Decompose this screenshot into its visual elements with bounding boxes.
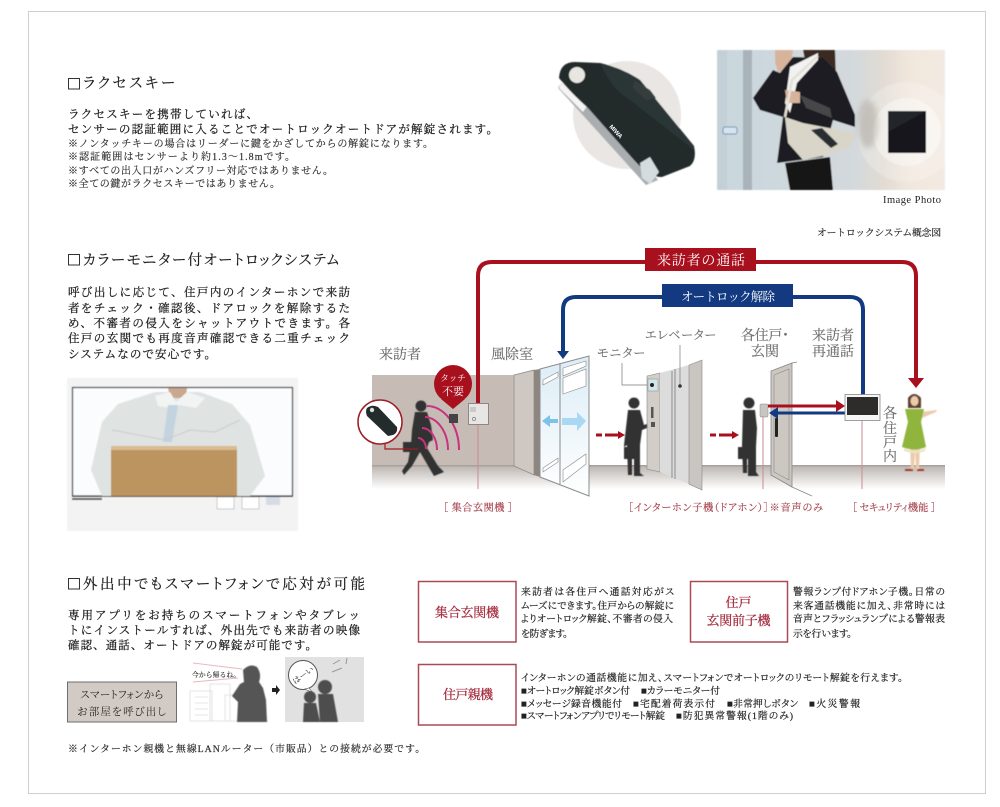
text block: door unit description: 示を行います。 [793, 628, 852, 640]
text block: main unit description: インターホンの通話機能に加え、スマートフォンでオートロックのリモート解錠を行えます。 [521, 671, 903, 684]
text block: Lacses key description [68, 107, 498, 190]
callout: touch not required: タッチ [440, 373, 466, 383]
feature list: ■防犯異常警報(1階のみ) [676, 709, 793, 722]
windbreak room door [514, 356, 589, 496]
illustration: family answering call [285, 657, 364, 722]
text block: smartphone description: 確認、通話、オートドアの解錠が可能です。 [68, 638, 317, 652]
panel: colour monitor auto-lock text [68, 252, 350, 361]
feature list: ■非常押しボタン [727, 697, 798, 710]
image: Lacses key product [558, 61, 695, 185]
device labels [443, 501, 936, 514]
building background: wall and floor [372, 375, 945, 489]
text block: entrance intercom description: を防ぎます。 [521, 627, 568, 640]
red path: visitor call: 来訪者の通話 [657, 252, 745, 269]
arrow: to family at home [272, 685, 280, 695]
text block: Lacses key description: ラクセスキーを携帯していれば、 [68, 107, 258, 121]
label box: entrance intercom [418, 582, 516, 642]
feature list [521, 684, 860, 722]
feature list: ■宅配着荷表示付 [633, 697, 715, 710]
image: Lacses key product: MIWA [608, 124, 624, 141]
text block: entrance intercom description: ムーズにできます。住戸からの解錠に [521, 599, 674, 612]
callout: touch not required [434, 365, 472, 409]
diagram labels: 風除室 [491, 346, 533, 363]
note: router connection required: ※インターホン親機と無線LANルーター（市販品）との接続が必要です。 [68, 742, 425, 755]
blue path: auto-lock release: オートロック解除 [681, 290, 775, 304]
device labels: ［ 集合玄関機 ］ [443, 501, 513, 514]
text block: Lacses key description: ※ノンタッチキーの場合はリーダーに鍵をかざしてからの解錠になります。 [68, 137, 433, 150]
text block: colour monitor description: め、不審者の侵入をシャットアウトできます。各 [68, 316, 350, 330]
feature list: ■火災警報 [809, 697, 860, 710]
text block: door unit description: 音声とフラッシュランプによる警報表 [793, 612, 945, 625]
button: call room from smartphone: お部屋を呼び出し [77, 705, 166, 718]
leader lines [478, 400, 862, 489]
panel: entrance intercom explanation [418, 582, 674, 642]
diagram labels: 再通話 [812, 344, 854, 360]
diagram labels [379, 327, 897, 465]
label box: entrance intercom: 集合玄関機 [435, 605, 500, 620]
diagram labels: エレベーター [645, 328, 716, 342]
text block: entrance intercom description: 来訪者は各住戸へ通話対応がス [521, 585, 674, 598]
diagram labels: 各住戸・ [741, 328, 789, 344]
diagram labels: 来訪者 [812, 327, 854, 344]
device labels: ［ セキュリティ機能 ］ [852, 501, 936, 514]
dashed arrow to residence [710, 431, 739, 439]
residence door [760, 362, 812, 496]
entrance intercom device [468, 404, 488, 424]
text block: smartphone description: トにインストールすれば、外出先でも来訪者の映像 [68, 623, 360, 637]
diagram labels: 各 [883, 406, 897, 422]
elevator hall [622, 345, 702, 490]
panel: door unit explanation [690, 582, 945, 642]
image: monitor showing delivery person [67, 378, 298, 531]
text block: door unit description [793, 585, 945, 640]
text block: Lacses key description: ※全ての鍵がラクセスキーではありません。 [68, 177, 280, 190]
illustration: family answering call: はーい [291, 665, 316, 686]
text block: colour monitor description: システムなので安心です。 [68, 347, 216, 361]
dashed arrow to elevator hall [596, 431, 625, 439]
person at door [738, 398, 759, 476]
illustration: woman calling home by smartphone: 今から帰るね。 [192, 670, 240, 679]
feature list: ■カラーモニター付 [641, 684, 720, 697]
image: woman carrying key past sensor [717, 50, 957, 190]
red path: visitor call [478, 248, 924, 404]
text block: door unit description: 来客通話機能に加え、非常時には [793, 599, 945, 612]
feature list: ■スマートフォンアプリでリモート解錠 [521, 709, 665, 722]
diagram labels: モニター [597, 346, 645, 360]
diagram labels: 玄関 [751, 343, 779, 360]
text block: Lacses key description: ※認証範囲はセンサーより約1.3～1.8mです。 [68, 150, 295, 163]
heading: smartphone response: 外出中でもスマートフォンで応対が可能 [83, 576, 365, 593]
heading: colour monitor auto-lock: カラーモニター付オートロックシステム [83, 252, 339, 269]
text block: door unit description: 警報ランプ付ドアホン子機。日常の [793, 585, 945, 598]
text block: colour monitor description: 者をチェック・確認後、ドアロックを解除するた [68, 301, 350, 315]
room monitor [845, 394, 880, 420]
label box: door unit: 住戸 [725, 595, 752, 610]
diagram labels: 内 [883, 448, 897, 465]
resident woman [902, 394, 937, 471]
blue path: auto-lock release [557, 284, 863, 395]
two-way voice arrows [768, 400, 845, 419]
device labels: ［インターホン子機（ドアホン）］※音声のみ [628, 501, 823, 514]
illustration: woman calling home by smartphone [190, 663, 268, 722]
feature list: ■オートロック解錠ボタン付 [521, 684, 630, 697]
panel: Lacses key text [68, 76, 498, 190]
person at intercom [624, 398, 647, 476]
heading: Lacses key: ラクセスキー [83, 76, 175, 92]
text block: entrance intercom description: よりオートロック解錠、不審者の侵入 [521, 612, 673, 625]
button: call room from smartphone [68, 682, 176, 722]
panel: smartphone response text [68, 576, 365, 652]
button: call room from smartphone: スマートフォンから [80, 689, 163, 701]
panel: main unit explanation [418, 664, 903, 725]
caption: Image Photo: Image Photo [883, 195, 941, 206]
chart: auto-lock system concept diagram [358, 248, 945, 514]
text block: smartphone description: 専用アプリをお持ちのスマートフォンやタブレッ [68, 608, 360, 622]
text block: Lacses key description: ※すべての出入口がハンズフリー対応ではありません。 [68, 164, 333, 177]
label box: main unit: 住戸親機 [443, 687, 494, 702]
label box: main unit [418, 664, 516, 725]
label box: door unit: 玄関前子機 [706, 613, 771, 628]
text block: colour monitor description [68, 285, 350, 361]
text block: Lacses key description: センサーの認証範囲に入ることでオートロックオートドアが解錠されます。 [68, 122, 498, 136]
text block: colour monitor description: 呼び出しに応じて、住戸内のインターホンで来訪 [68, 285, 350, 299]
feature list: ■メッセージ録音機能付 [521, 697, 622, 710]
text block: smartphone description [68, 608, 360, 652]
text block: colour monitor description: 住戸の玄関でも再度音声確認できる二重チェック [68, 331, 350, 345]
diagram labels: 来訪者 [379, 346, 421, 363]
label box: door unit [690, 582, 788, 642]
callout: touch not required: 不要 [442, 385, 464, 398]
visitor with key and sensor waves [358, 400, 459, 476]
caption: auto-lock concept diagram title: オートロックシステム概念図 [817, 226, 941, 239]
diagram labels: 戸 [883, 435, 897, 451]
diagram labels: 住 [883, 421, 897, 437]
text block: entrance intercom description [521, 585, 674, 640]
